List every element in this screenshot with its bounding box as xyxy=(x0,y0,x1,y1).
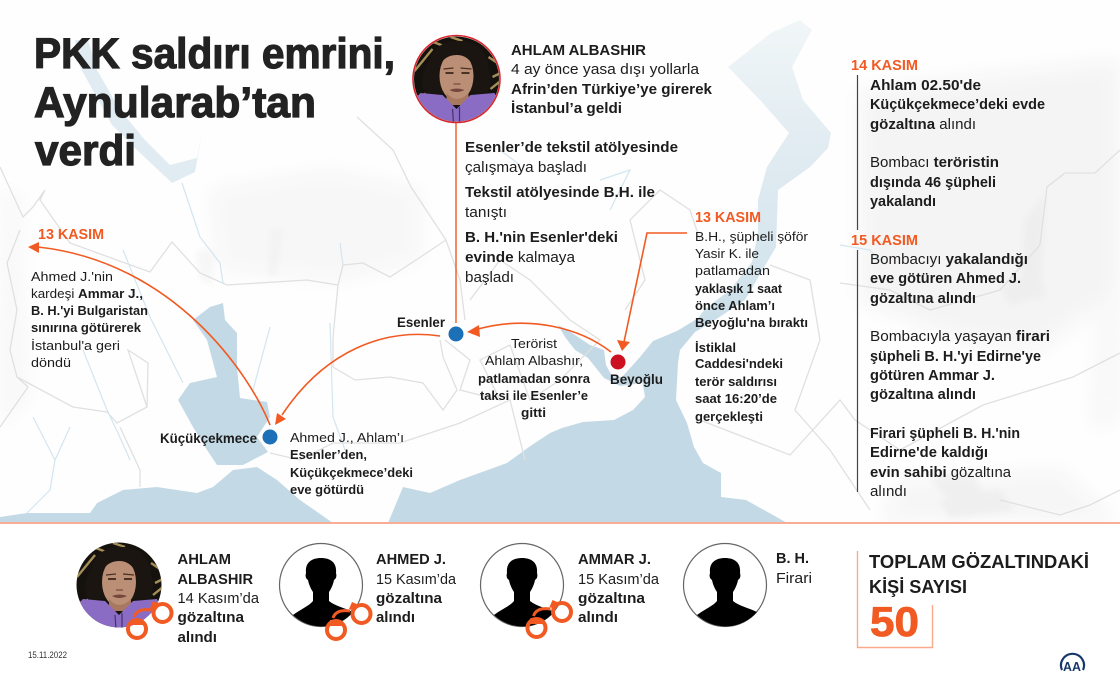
text: Esenler timeline: B. H.'nin Esenler'deki xyxy=(465,230,618,246)
text: Ahmed J.'s brother xyxy=(31,269,148,370)
text: taxi to Esenler: taksi ile Esenler’e xyxy=(480,388,588,403)
person: Ammar J. xyxy=(480,544,660,637)
heading: total xyxy=(869,552,1089,597)
date label: 13 Kasım middle: 13 KASIM xyxy=(695,209,761,226)
text: driver and attack time: İstiklal xyxy=(695,340,736,355)
text: Esenler timeline xyxy=(465,140,678,286)
text: driver and attack time: patlamadan xyxy=(695,263,770,278)
text: 14 Kasım events: gözaltına alındı xyxy=(870,117,976,133)
text: 14 Kasım events: Ahlam 02.50'de xyxy=(870,78,981,94)
text: Esenler timeline: çalışmaya başladı xyxy=(465,160,587,176)
heading: total: TOPLAM GÖZALTINDAKİ xyxy=(869,552,1089,572)
marker: Beyoğlu xyxy=(610,354,626,370)
text: Ahlam status xyxy=(178,552,260,646)
text: driver and attack time xyxy=(695,229,809,424)
text: Ahmed J.'s brother: sınırına götürerek xyxy=(31,320,142,335)
text: Ahmed status: gözaltına xyxy=(376,591,443,607)
text: 14 Kasım events: dışında 46 şüpheli xyxy=(870,175,996,191)
arrow: Küçükçekmece to Bulgarian border xyxy=(28,242,270,425)
date label: 15 Kasım: 15 KASIM xyxy=(851,232,918,249)
text: 15 Kasım events: evin sahibi gözaltına xyxy=(870,465,1012,481)
person: Ahmed J. xyxy=(280,544,457,639)
place label: Küçükçekmece: Küçükçekmece xyxy=(160,430,257,446)
icon: AA logo: AA xyxy=(1063,659,1082,674)
text: 15 Kasım events: gözaltına alındı xyxy=(870,291,976,307)
water: Küçükçekmece lake xyxy=(178,303,270,465)
number: 50: 50 xyxy=(870,598,919,645)
timeline rule: right column xyxy=(856,75,858,492)
text: Ahmed status: alındı xyxy=(376,610,415,626)
text: Esenler timeline: Esenler’de tekstil atölyesinde xyxy=(465,140,678,156)
text: Ahmed J.'s brother: döndü xyxy=(31,355,71,370)
text: taxi to Esenler xyxy=(478,336,591,420)
text: Ahmed took Ahlam xyxy=(290,430,413,497)
text: 14 Kasım events xyxy=(870,78,1045,210)
date stamp: 15.11.2022 xyxy=(28,650,67,661)
rivers xyxy=(27,150,885,513)
text: Ahmed status: 15 Kasım’da xyxy=(376,572,457,588)
text: driver and attack time: Beyoğlu'na bıraktı xyxy=(695,315,808,330)
place label: Esenler: Esenler xyxy=(397,314,446,330)
text: Ahmed J.'s brother: Ahmed J.'nin xyxy=(31,269,113,284)
text: Esenler timeline: evinde kalmaya xyxy=(465,250,576,266)
text: Ahlam Albashır bio: 4 ay önce yasa dışı yollarla xyxy=(511,62,700,78)
title: verdi xyxy=(35,127,136,175)
photo: Ahlam Albashır (map) xyxy=(410,35,502,129)
title: Aynularab’tan xyxy=(34,79,316,127)
text: Ahlam Albashır bio: AHLAM ALBASHIR xyxy=(511,43,647,59)
text: 14 Kasım events: Küçükçekmece’deki evde xyxy=(870,97,1045,113)
water: Sea of Marmara and lower Bosphorus xyxy=(0,320,789,524)
place label: Beyoğlu: Beyoğlu xyxy=(610,371,663,387)
text: Ammar status xyxy=(578,552,660,626)
text: Ahmed J.'s brother: kardeşi Ammar J., xyxy=(31,286,143,301)
text: Ammar status: 15 Kasım’da xyxy=(578,572,660,588)
text: driver and attack time: yaklaşık 1 saat xyxy=(695,281,783,296)
text: Ahlam Albashır bio: Afrin’den Türkiye’ye girerek xyxy=(511,82,713,98)
text: Ahmed status: AHMED J. xyxy=(376,552,446,568)
icon: silhouette xyxy=(280,544,362,626)
date label: 13 Kasım left: 13 KASIM xyxy=(38,226,104,243)
text: driver and attack time: önce Ahlam’ı xyxy=(695,298,775,313)
text: B. H. status: Firari xyxy=(776,571,812,587)
text: 15 Kasım events xyxy=(870,252,1050,500)
text: Ahmed took Ahlam: eve götürdü xyxy=(290,482,364,497)
photo: Ahlam Albashır (bottom) xyxy=(76,542,162,628)
text: Esenler timeline: tanıştı xyxy=(465,205,507,221)
text: Esenler timeline: başladı xyxy=(465,270,514,286)
text: 15 Kasım events: gözaltına alındı xyxy=(870,387,976,403)
panel: total detained xyxy=(858,551,1089,648)
text: Ahlam Albashır bio xyxy=(511,43,713,117)
icon: handcuffs xyxy=(528,600,571,637)
text: driver and attack time: Yasir K. ile xyxy=(695,246,759,261)
text: B. H. status: B. H. xyxy=(776,551,809,567)
arrow: Esenler to Küçükçekmece xyxy=(275,334,440,425)
text: 15 Kasım events: eve götüren Ahmed J. xyxy=(870,271,1021,287)
title: PKK saldırı emrini, xyxy=(34,30,395,78)
text: driver and attack time: saat 16:20’de xyxy=(695,391,777,406)
text: Ahlam Albashır bio: İstanbul’a geldi xyxy=(511,100,622,117)
text: Ahlam status: alındı xyxy=(178,630,217,646)
text: 15 Kasım events: şüpheli B. H.'yi Edirne'ye xyxy=(870,349,1041,365)
text: taxi to Esenler: Terörist xyxy=(511,336,557,351)
text: Ammar status: AMMAR J. xyxy=(578,552,651,568)
text: 15 Kasım events: Bombacıyla yaşayan firari xyxy=(870,329,1050,345)
date label: 14 Kasım: 14 KASIM xyxy=(851,57,918,74)
arrow: 13 Kasım note to Beyoğlu xyxy=(617,233,687,351)
marker: Küçükçekmece xyxy=(262,430,278,444)
icon: silhouette xyxy=(684,544,766,626)
text: Ahmed J.'s brother: B. H.'yi Bulgaristan xyxy=(31,303,148,318)
text: Ahlam status: gözaltına xyxy=(178,610,245,626)
text: B. H. status xyxy=(776,551,812,587)
text: Ahmed status xyxy=(376,552,457,626)
title xyxy=(34,30,395,175)
person: Ahlam Albashır xyxy=(73,541,260,646)
text: taxi to Esenler: gitti xyxy=(521,405,546,420)
text: 15 Kasım events: alındı xyxy=(870,484,907,500)
water: Bosphorus xyxy=(695,20,831,322)
icon: AA logo xyxy=(1061,654,1084,674)
text: 14 Kasım events: Bombacı teröristin xyxy=(870,155,999,171)
text: Esenler timeline: Tekstil atölyesinde B.H. ile xyxy=(465,185,655,201)
text: 15 Kasım events: götüren Ammar J. xyxy=(870,368,995,384)
icon: handcuffs xyxy=(128,601,172,638)
marker: Esenler xyxy=(448,326,464,342)
text: taxi to Esenler: Ahlam Albashır, xyxy=(485,353,583,368)
heading: total: KİŞİ SAYISI xyxy=(869,577,967,597)
icon: handcuffs xyxy=(327,602,370,639)
text: 15 Kasım events: Edirne'de kaldığı xyxy=(870,445,988,461)
bottom map border xyxy=(0,522,1120,524)
text: 14 Kasım events: yakalandı xyxy=(870,194,936,210)
water: upper lake xyxy=(75,40,203,183)
icon: silhouette xyxy=(480,544,564,626)
text: 15 Kasım events: Firari şüpheli B. H.'nin xyxy=(870,426,1020,442)
text: driver and attack time: B.H., şüpheli şöför xyxy=(695,229,809,244)
person: B. H. xyxy=(684,544,812,626)
text: Ahmed took Ahlam: Küçükçekmece’deki xyxy=(290,465,413,480)
text: Ahlam status: AHLAM xyxy=(178,552,231,568)
text: Ammar status: gözaltına xyxy=(578,591,646,607)
text: Ahlam status: ALBASHIR xyxy=(178,572,254,588)
text: Ammar status: alındı xyxy=(578,610,618,626)
text: Ahmed took Ahlam: Esenler’den, xyxy=(290,447,367,462)
district boundaries xyxy=(0,117,1120,515)
text: driver and attack time: gerçekleşti xyxy=(695,409,763,424)
text: driver and attack time: Caddesi'ndeki xyxy=(695,356,783,371)
route: Ahlam profile to Esenler line xyxy=(455,122,457,323)
text: Ahlam status: 14 Kasım’da xyxy=(178,591,260,607)
arrow: Beyoğlu to Esenler xyxy=(467,323,611,352)
text: 15 Kasım events: Bombacıyı yakalandığı xyxy=(870,252,1028,268)
text: Ahmed J.'s brother: İstanbul'a geri xyxy=(31,338,120,353)
text: driver and attack time: terör saldırısı xyxy=(695,374,777,389)
text: taxi to Esenler: patlamadan sonra xyxy=(478,371,591,386)
text: Ahmed took Ahlam: Ahmed J., Ahlam’ı xyxy=(290,430,404,445)
map of Istanbul xyxy=(0,0,1120,524)
